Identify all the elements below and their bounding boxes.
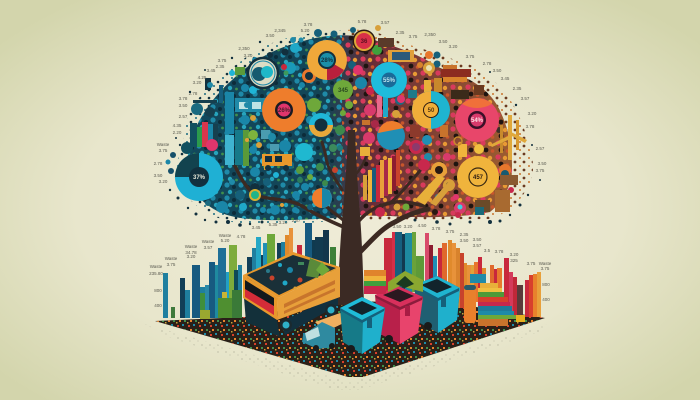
bin: cyan	[340, 297, 385, 354]
tiny labels around canopy: 3.20	[528, 111, 537, 116]
tiny labels around canopy: 3.20	[159, 179, 168, 184]
donut: 37% cyan	[175, 153, 223, 201]
tiny labels around canopy: 3.50	[493, 68, 502, 73]
tiny labels around canopy: 3.50	[538, 161, 547, 166]
small delivery van	[302, 313, 350, 351]
donut: pink	[455, 98, 499, 142]
tiny labels around canopy: 3.50	[154, 173, 163, 178]
donut: orange: 26%	[278, 108, 291, 114]
tiny labels around canopy: 3.20	[244, 53, 253, 58]
chart: left canopy bars	[190, 67, 279, 170]
chart labels: right: 3.75	[541, 266, 550, 271]
tiny labels around canopy: 2,345	[274, 28, 286, 33]
donut: pink: 54%	[471, 118, 484, 124]
tiny labels around canopy: 2.78	[483, 61, 492, 66]
donut: cyan top right: 55%	[383, 78, 396, 84]
tiny labels around canopy: Waste	[157, 142, 170, 147]
tiny labels around canopy: 4.25	[198, 75, 207, 80]
chart labels: left: 3.45	[252, 225, 261, 230]
donut: 37% cyan: 37%	[193, 175, 206, 181]
chart labels: right: 3.78	[495, 249, 504, 254]
tree: branches	[235, 142, 428, 252]
tree: trunk	[337, 130, 364, 305]
tiny labels around canopy: 3.45	[207, 68, 216, 73]
chart labels: right: 325	[510, 258, 518, 263]
chart labels: left: 400	[154, 303, 162, 308]
tiny labels around canopy: 3.75	[466, 54, 475, 59]
donut: orange	[262, 88, 306, 132]
stack of coloured blocks	[464, 274, 525, 326]
chart labels: right: 3.75	[446, 229, 455, 234]
chart labels: right: 3.78	[432, 226, 441, 231]
chart labels: left: Waste	[219, 233, 232, 238]
chart labels: left: Waste	[165, 256, 178, 261]
tree: scattered canopy dots right	[345, 25, 518, 218]
icon: truck glyph	[262, 154, 292, 171]
tiny labels around canopy: 3.78	[179, 96, 188, 101]
truck left side	[243, 275, 278, 320]
chart labels: right	[393, 223, 552, 302]
chart labels: right: 400	[542, 297, 550, 302]
chart: right bar chart	[384, 223, 552, 318]
tiny labels around canopy: 3.50	[439, 39, 448, 44]
tiny labels around canopy: 2.57	[536, 146, 545, 151]
donut: pink ring top	[352, 30, 376, 52]
donut: yellow 457: 457	[473, 175, 484, 181]
tiny labels around canopy: 3.20	[193, 80, 202, 85]
dump truck	[243, 252, 340, 337]
chart: right canopy stripe bars	[363, 150, 400, 202]
chart labels: right: 2.35	[460, 232, 469, 237]
tiny labels around canopy: 5.78	[358, 19, 367, 24]
tiny labels around canopy: 2.35	[216, 64, 225, 69]
bin: pink	[375, 286, 423, 344]
icon: magnifier ring	[248, 58, 278, 88]
chart labels: left: 800	[154, 288, 162, 293]
icon: wind turbine	[490, 115, 527, 160]
tiny labels around canopy: 2,350	[238, 46, 250, 51]
pie: orange and blue	[377, 121, 405, 150]
chart labels: right: 3.20	[510, 252, 519, 257]
tiny labels around canopy: 3.75	[536, 168, 545, 173]
chart labels: left: 5.20	[221, 238, 230, 243]
truck right side	[277, 267, 340, 320]
tiny labels around canopy: 3.50	[266, 33, 275, 38]
donut: yellow and cyan: 50	[428, 108, 435, 114]
chart labels: right: 3.50	[393, 224, 402, 229]
tiny labels around canopy: 3.75	[409, 34, 418, 39]
chart labels: left: Waste	[150, 264, 163, 269]
chart labels: right: 3.50	[460, 238, 469, 243]
tiny labels around canopy: 3.57	[521, 96, 530, 101]
donut: yellow top: 28%	[321, 58, 334, 64]
donut: cyan top right	[371, 62, 407, 98]
tree: scattered canopy dots left	[166, 29, 346, 215]
chart labels: left: 3.75	[167, 262, 176, 267]
icon: yellow padlock	[454, 137, 462, 145]
tiny labels around canopy: 2.78	[189, 91, 198, 96]
tiny labels around canopy: 3.45	[501, 76, 510, 81]
chart labels: left: 235.80	[149, 271, 163, 276]
badge: green 345: 345	[338, 88, 349, 94]
chart labels: left: 2.57	[292, 218, 301, 223]
chart labels: left: 5.35	[269, 222, 278, 227]
tiny labels around canopy: 2.35	[396, 30, 405, 35]
tiny labels around canopy: 2,350	[424, 32, 436, 37]
chart labels: right: 800	[542, 282, 550, 287]
donut: yellow and cyan	[412, 91, 450, 129]
donut: small cyan	[309, 113, 333, 137]
chart labels: left: 3.57	[204, 245, 213, 250]
chart labels: left: Waste	[202, 239, 215, 244]
chart labels: right: Waste	[539, 261, 552, 266]
green roof stack behind bins	[364, 270, 423, 294]
chart: left bar chart	[149, 218, 336, 319]
truck container top with waste	[243, 252, 340, 298]
tiny labels around canopy: 3.78	[304, 22, 313, 27]
badge: green 345	[333, 80, 353, 100]
chart labels: right: 3.75	[527, 261, 536, 266]
chart labels: left: 3.20	[187, 254, 196, 259]
tiny labels around canopy: 3.57	[381, 20, 390, 25]
tiny labels around canopy: 2.20	[173, 130, 182, 135]
donut: yellow top	[307, 40, 347, 80]
chart labels: left: Waste	[185, 244, 198, 249]
chart labels: left: 3.20	[279, 220, 288, 225]
donut: pink ring top: 36	[361, 39, 368, 45]
tiny labels around canopy: 4.35	[173, 123, 182, 128]
chart labels: right: 3.57	[473, 243, 482, 248]
canopy edge speckles	[169, 41, 541, 227]
tiny labels around canopy: 3.75	[159, 148, 168, 153]
tiny labels around canopy: 2.35	[513, 86, 522, 91]
tree canopy base	[188, 35, 512, 220]
ground plot	[155, 300, 545, 377]
canopy speckled outer fringe	[174, 30, 533, 224]
tiny labels around canopy: 3.20	[449, 44, 458, 49]
tiny labels around canopy	[154, 19, 547, 184]
chart labels: right: 3.20	[404, 224, 413, 229]
tiny labels around canopy: 5.20	[301, 28, 310, 33]
donut: yellow 457	[457, 156, 499, 198]
chart labels: right: 3.50	[473, 237, 482, 242]
tiny labels around canopy: 2.57	[179, 114, 188, 119]
bin: teal	[414, 276, 460, 333]
tiny labels around canopy: 3.75	[218, 58, 227, 63]
tiny labels around canopy: 3.78	[526, 124, 535, 129]
chart labels: right: 4.50	[418, 223, 427, 228]
chart labels: left	[149, 218, 301, 308]
tiny labels around canopy: 3.50	[179, 103, 188, 108]
truck chassis	[244, 298, 280, 337]
chart labels: left: 4.78	[237, 234, 246, 239]
faint ground dust	[145, 322, 555, 390]
chart labels: left: 34.78	[185, 250, 197, 255]
tiny labels around canopy: 2.78	[154, 161, 163, 166]
chart labels: right: 3.5	[484, 248, 491, 253]
icon: orange half disc	[312, 188, 332, 208]
badge: cyan	[295, 143, 313, 161]
